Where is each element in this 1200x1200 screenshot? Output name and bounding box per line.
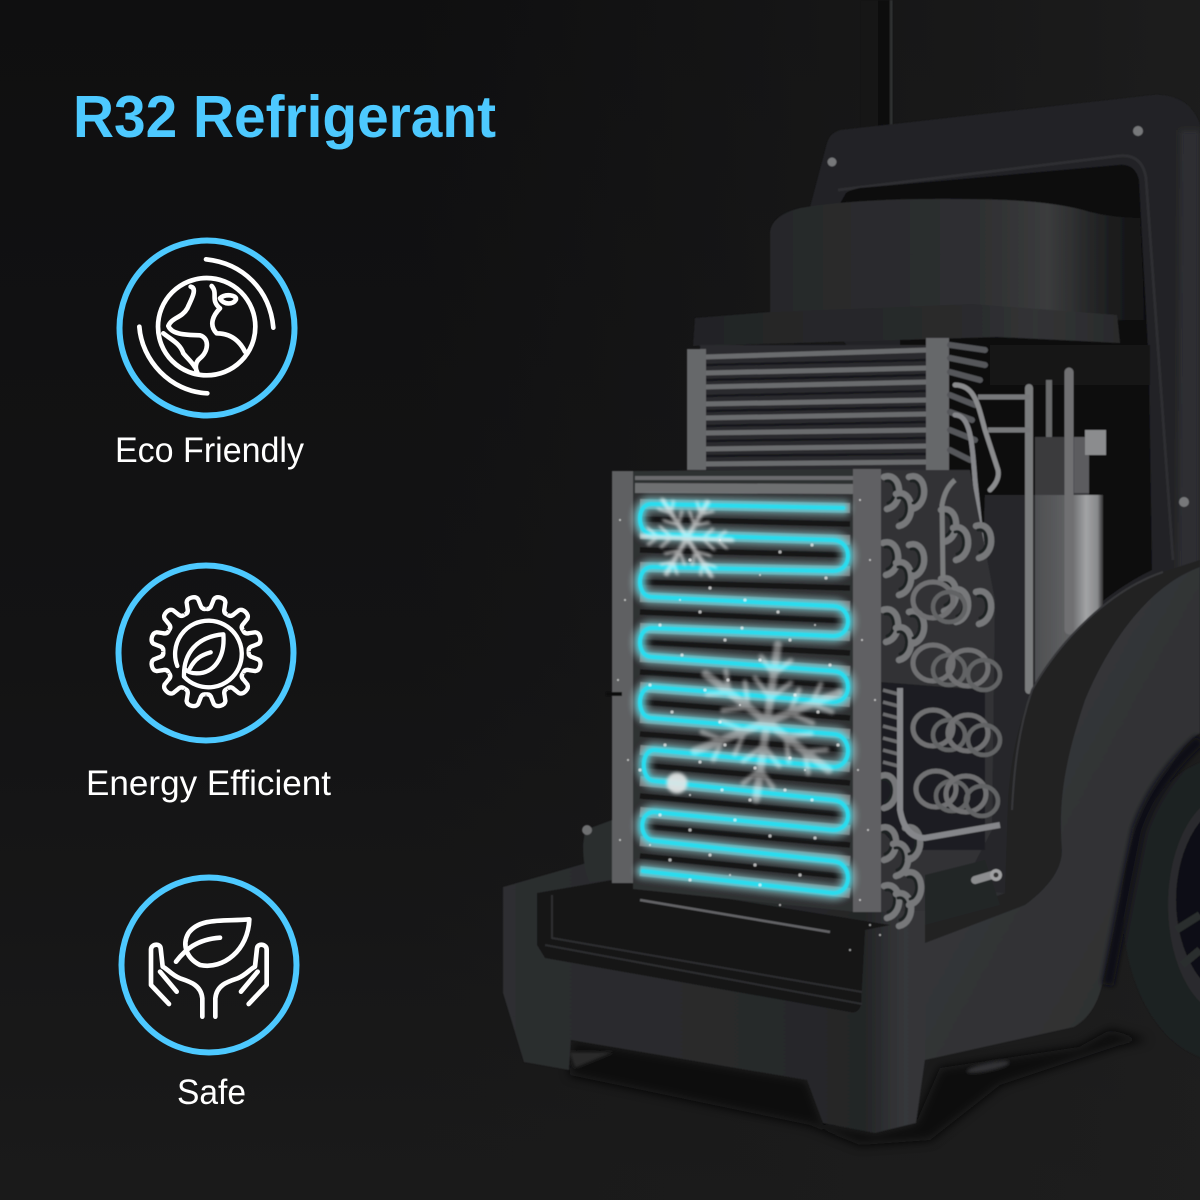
wheel (1123, 758, 1200, 1062)
snowflake lower (680, 634, 854, 810)
inner mesh wall (970, 495, 1035, 895)
machine: dehumidifier cutaway (503, 0, 1200, 1145)
icon: globe (139, 259, 273, 393)
floor foot left (569, 1052, 614, 1068)
top plate (693, 304, 1120, 346)
compressor (978, 372, 1106, 690)
feature: eco friendly (115, 240, 304, 470)
rear coil (687, 338, 949, 470)
icon: gear with leaf (149, 595, 263, 709)
valve block with nozzle (925, 860, 1002, 925)
floor foot right highlight (966, 1059, 1010, 1075)
right coil bend block (881, 470, 1000, 926)
frame inner groove (838, 156, 1173, 560)
dark ceiling inside (990, 345, 1150, 385)
label: Safe (177, 1073, 246, 1112)
feature: safe (122, 878, 296, 1112)
frost speckles (618, 500, 880, 950)
rear coil side pipes (950, 345, 998, 620)
front coil (606, 469, 881, 912)
title: R32 Refrigerant (73, 84, 496, 150)
frame right highlight (1178, 130, 1200, 575)
handle frame (808, 95, 1200, 640)
frost blob (666, 772, 688, 794)
body fender and base (925, 560, 1200, 1060)
under-body shadow (570, 1030, 1147, 1145)
feature: energy efficient (86, 566, 331, 803)
snowflake upper (627, 479, 747, 597)
label: Energy Efficient (86, 764, 331, 803)
icon: hands holding leaf (151, 919, 267, 1017)
machine interior (838, 165, 1152, 900)
base tray (503, 820, 1005, 1133)
ring (120, 240, 294, 416)
cyan refrigerant coil (640, 504, 848, 893)
blower dome (770, 199, 1145, 320)
ring (122, 878, 296, 1052)
label: Eco Friendly (115, 431, 304, 470)
handle pole (860, 0, 893, 128)
ring (118, 566, 294, 740)
screws (828, 126, 1189, 507)
